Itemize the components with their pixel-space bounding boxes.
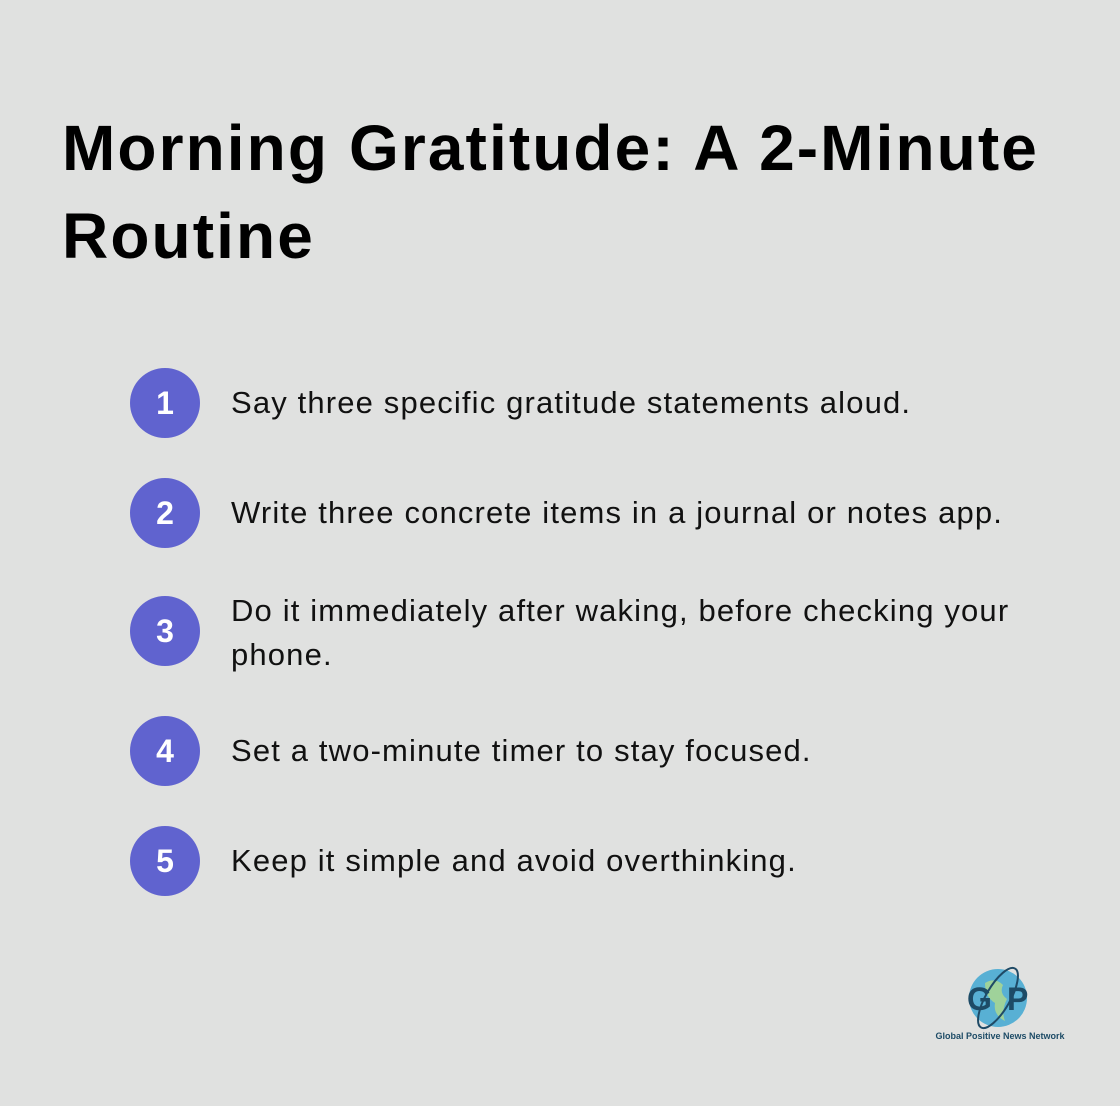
step 1: 1 xyxy=(156,385,174,421)
step 2: 2 xyxy=(156,495,174,531)
step 1: Say three specific gratitude statements aloud. xyxy=(231,385,911,420)
step 5: 5 xyxy=(156,843,174,879)
step 5: Keep it simple and avoid overthinking. xyxy=(231,843,797,878)
step 4: 4 xyxy=(156,733,174,769)
step 3: Do it immediately after waking, before checking your xyxy=(231,593,1009,628)
step 3: 3 xyxy=(156,613,174,649)
step 5 xyxy=(130,826,797,896)
logo: P xyxy=(1007,981,1028,1017)
step 3 xyxy=(130,593,1009,672)
title: Routine xyxy=(62,200,315,272)
step 1 xyxy=(130,368,911,438)
step 3: phone. xyxy=(231,637,333,672)
step 2: Write three concrete items in a journal or notes app. xyxy=(231,495,1003,530)
logo xyxy=(935,966,1065,1041)
step 4 xyxy=(130,716,812,786)
step 2 xyxy=(130,478,1003,548)
title: Morning Gratitude: A 2-Minute xyxy=(62,112,1039,184)
logo: G xyxy=(967,981,992,1017)
logo: Global Positive News Network xyxy=(935,1031,1065,1041)
step 4: Set a two-minute timer to stay focused. xyxy=(231,733,812,768)
title xyxy=(62,112,1039,272)
